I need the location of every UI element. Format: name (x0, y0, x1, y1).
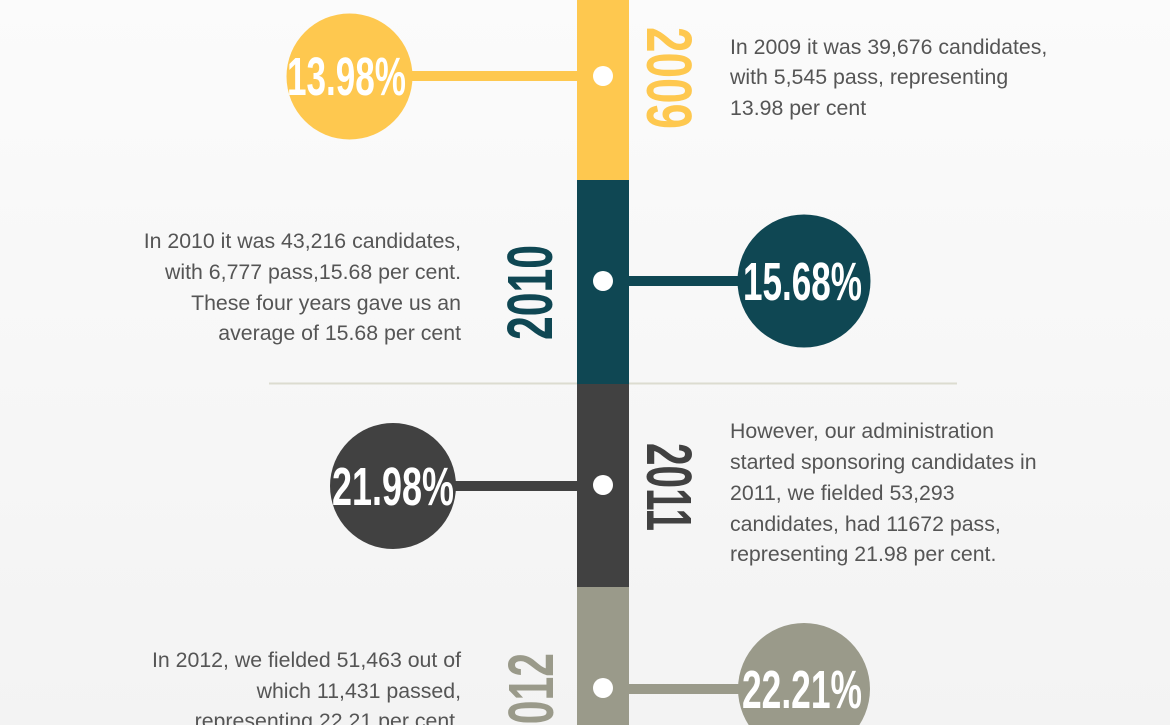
connector 2012 (629, 684, 744, 694)
marker dot 2010 (593, 271, 613, 291)
marker dot 2011 (593, 475, 613, 495)
percentage badge 2010 (738, 214, 870, 348)
timeline segment 2012 (577, 587, 629, 725)
description 2010: average of 15.68 per cent (218, 321, 461, 345)
timeline segment 2010 (577, 180, 629, 384)
connector 2011 (450, 481, 577, 491)
marker dot 2012 (593, 678, 613, 698)
panel: 2010 (144, 180, 870, 384)
panel: 2012 (152, 587, 870, 725)
year label 2009: 2009 (633, 27, 705, 129)
description 2010: with 6,777 pass,15.68 per cent. (164, 260, 461, 284)
marker dot 2009 (593, 66, 613, 86)
percentage badge 2012 (738, 623, 870, 725)
description 2009: with 5,545 pass, representing (729, 65, 1008, 89)
percentage badge 2009: 13.98% (287, 47, 406, 107)
connector 2010 (629, 276, 741, 286)
percentage badge 2010: 15.68% (743, 252, 862, 312)
year label 2010: 2010 (494, 245, 566, 340)
percentage badge 2012: 22.21% (742, 660, 862, 720)
panel: 2011 (330, 384, 1037, 587)
description 2011: started sponsoring candidates in (730, 450, 1037, 474)
description 2012: which 11,431 passed, (256, 679, 461, 703)
description 2009: 13.98 per cent (730, 96, 866, 120)
year label 2011: 2011 (633, 443, 705, 531)
description 2010: These four years gave us an (191, 291, 461, 315)
percentage badge 2011: 21.98% (332, 457, 454, 517)
description 2011: However, our administration (730, 419, 994, 443)
panel: 2009 (286, 0, 1047, 180)
description 2009: In 2009 it was 39,676 candidates, (730, 35, 1047, 59)
description 2011: representing 21.98 per cent. (730, 542, 996, 566)
timeline segment 2009 (577, 0, 629, 180)
description 2011: candidates, had 11672 pass, (730, 512, 1001, 536)
description 2010: In 2010 it was 43,216 candidates, (144, 229, 461, 253)
description 2012: In 2012, we fielded 51,463 out of (152, 648, 461, 672)
connector 2009 (405, 71, 577, 81)
description 2011: 2011, we fielded 53,293 (730, 481, 955, 505)
percentage badge 2011 (330, 423, 456, 549)
percentage badge 2009 (286, 14, 412, 140)
timeline segment 2011 (577, 384, 629, 587)
